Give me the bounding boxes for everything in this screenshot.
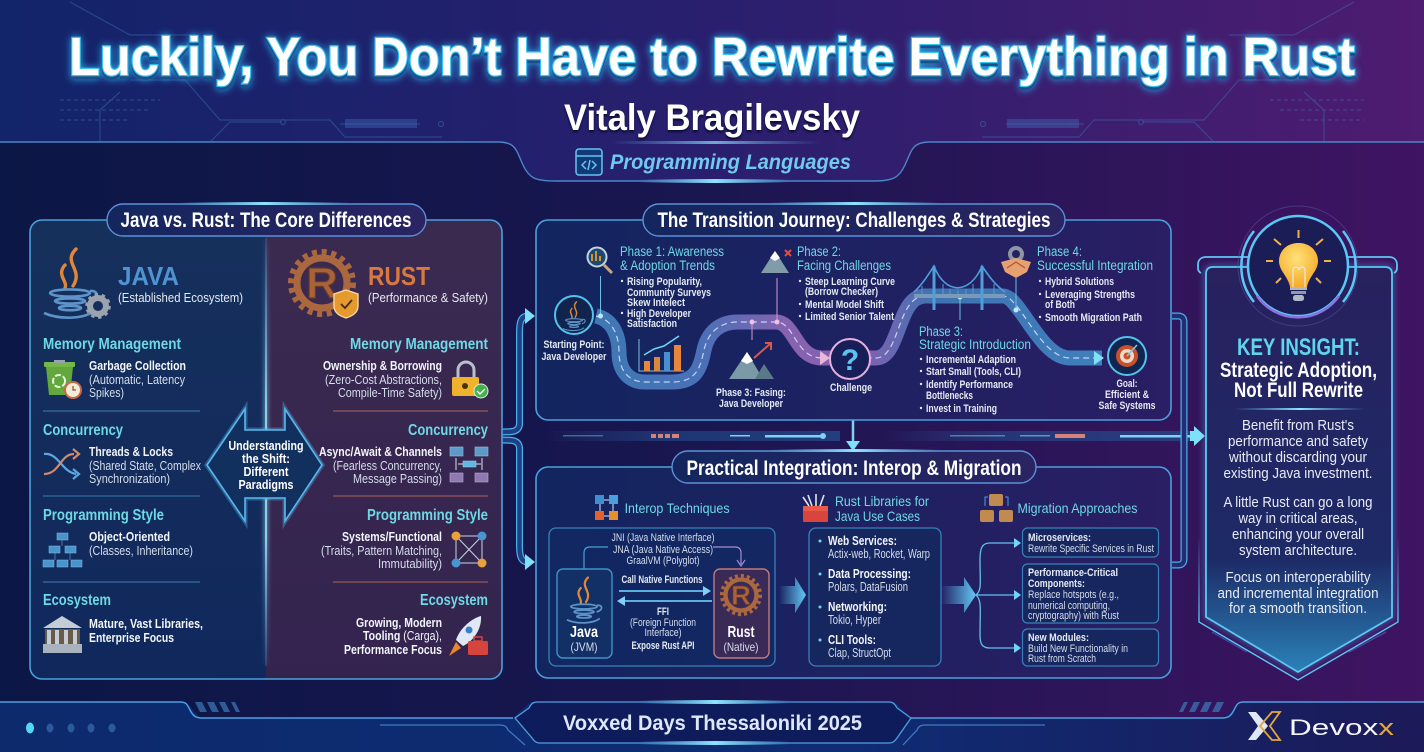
column: interop techniques: GraalVM (Polyglot): [626, 555, 700, 567]
arrow: libraries to migration branches: [941, 538, 1021, 653]
logo: devoxx: [1248, 712, 1394, 740]
icon: toolbox: [803, 494, 828, 522]
column: rust libraries: CLI Tools:: [828, 633, 876, 647]
card: performance critical: [1022, 564, 1158, 623]
column: interop techniques: JNA (Java Native Access): [613, 544, 713, 556]
phase 1: Rising Popularity,: [627, 276, 702, 288]
card: performance critical: numerical computing,: [1028, 600, 1110, 612]
rust header: (Performance & Safety): [368, 291, 488, 305]
java memory management: Memory Management: [43, 336, 181, 353]
column: rust libraries: Rust Libraries for: [835, 493, 929, 509]
icon: interop blocks: [595, 495, 618, 520]
java programming style: [43, 507, 193, 567]
card: performance critical: cryptography) with Rust: [1028, 610, 1119, 622]
column: interop techniques: (Foreign Function: [630, 617, 696, 629]
card: performance critical: Performance-Critical: [1028, 567, 1118, 579]
icon: padlock: [452, 362, 488, 398]
goal node: Efficient &: [1105, 389, 1149, 401]
icon: rocket and toolbox: [449, 616, 488, 656]
card: new modules: Rust from Scratch: [1028, 653, 1096, 665]
phase 3: Phase 3:: [919, 324, 963, 339]
phase 2: [761, 244, 895, 323]
rust concurrency: (Fearless Concurrency,: [333, 459, 442, 473]
mountain waypoint: [716, 343, 786, 410]
rust concurrency: [319, 422, 488, 486]
insight paragraph 1: performance and safety: [1228, 433, 1368, 450]
insight heading: [1220, 334, 1377, 402]
java programming style: Object-Oriented: [89, 530, 170, 544]
phase 3: Strategic Introduction: [919, 337, 1031, 352]
rust box: (Native): [724, 640, 758, 654]
rust programming style: (Traits, Pattern Matching,: [321, 544, 442, 558]
goal node: [1098, 337, 1156, 412]
java ecosystem: [43, 592, 203, 653]
rust ecosystem: Ecosystem: [420, 592, 488, 609]
logo: devoxx: Devox x: [1289, 715, 1394, 740]
phase 3: Invest in Training: [926, 403, 997, 415]
column: migration approaches: Migration Approaches: [1018, 500, 1138, 516]
java concurrency: Threads & Locks: [89, 445, 173, 459]
center double arrow: understanding the shift: Paradigms: [238, 478, 294, 492]
card: performance critical: Components:: [1028, 578, 1085, 590]
panel: Java vs Rust: [30, 202, 502, 679]
challenge node: Challenge: [830, 382, 872, 394]
icon: handshake with gear: [1001, 248, 1031, 278]
card: new modules: New Modules:: [1028, 632, 1089, 644]
center double arrow: understanding the shift: [207, 409, 322, 521]
rust memory management: Ownership & Borrowing: [323, 359, 442, 373]
goal node: Safe Systems: [1098, 400, 1156, 412]
center double arrow: understanding the shift: Different: [244, 465, 289, 479]
column: interop techniques: JNI (Java Native Interface): [612, 532, 714, 544]
column: interop techniques: [549, 495, 775, 666]
java programming style: Programming Style: [43, 507, 164, 524]
goal node: Goal:: [1116, 378, 1138, 390]
column: interop techniques: Call Native Functions: [622, 574, 702, 586]
rust concurrency: Async/Await & Channels: [319, 445, 442, 459]
column: rust libraries: [803, 493, 941, 666]
column: rust libraries: Clap, StructOpt: [828, 646, 891, 660]
rust box: Rust: [728, 624, 754, 641]
card: performance critical: Replace hotspots (e.g.,: [1028, 589, 1119, 601]
java box: Java: [570, 624, 598, 641]
insight paragraph 1: without discarding your: [1228, 449, 1367, 466]
phase 3: Identify Performance: [926, 379, 1013, 391]
icon: graph nodes: [452, 532, 486, 568]
phase 3: Incremental Adaption: [926, 354, 1016, 366]
challenge node: ?: [841, 344, 859, 377]
column: interop techniques: Interop Techniques: [625, 500, 730, 516]
insight paragraph 1: existing Java investment.: [1224, 465, 1372, 482]
insight heading: Not Full Rewrite: [1234, 379, 1363, 402]
rust programming style: [321, 507, 488, 571]
icon: crossing arrows: [44, 449, 79, 479]
phase 2: Steep Learning Curve: [805, 276, 895, 288]
column: rust libraries: Web Services:: [828, 534, 897, 548]
panel: practical integration: [536, 449, 1171, 678]
phase 4: [1001, 244, 1153, 324]
java box: (JVM): [570, 640, 598, 654]
java header: (Established Ecosystem): [118, 291, 243, 305]
card: microservices: Microservices:: [1028, 532, 1091, 544]
title: Luckily, You Don’t Have to Rewrite Everything in Rust: [69, 27, 1355, 87]
card: new modules: [1022, 629, 1158, 666]
column: migration approaches: [980, 494, 1158, 666]
speaker name: Vitaly Bragilevsky: [564, 97, 860, 138]
insight paragraph 3: for a smooth transition.: [1229, 600, 1367, 617]
java header: [118, 261, 243, 305]
category label: Programming Languages: [610, 151, 851, 174]
java ecosystem: Ecosystem: [43, 592, 111, 609]
rust memory management: Compile-Time Safety): [338, 386, 442, 400]
java memory management: Garbage Collection: [89, 359, 186, 373]
icon: light bulb: [1238, 206, 1358, 326]
phase 2: (Borrow Checker): [805, 286, 878, 298]
phase 2: Facing Challenges: [797, 258, 891, 273]
insight heading: KEY INSIGHT:: [1237, 334, 1360, 361]
java ecosystem: Enterprise Focus: [89, 631, 174, 645]
icon: institution: [43, 616, 82, 653]
phase 4: Hybrid Solutions: [1045, 276, 1114, 288]
icon: magnifier: [588, 248, 612, 273]
challenge node: [830, 339, 872, 394]
insight paragraph 2: enhancing your overall: [1232, 526, 1364, 543]
icon: rust gear with shield: [291, 252, 358, 318]
center double arrow: understanding the shift: Understanding: [228, 439, 304, 453]
phase 2: Mental Model Shift: [805, 299, 884, 311]
phase 1: High Developer: [627, 308, 692, 320]
rust ecosystem: Tooling (Carga),: [363, 629, 442, 643]
java box: [557, 569, 612, 658]
footer event label: [515, 700, 911, 745]
card: microservices: [1022, 528, 1158, 557]
rust programming style: Programming Style: [367, 507, 488, 524]
phase 2: Phase 2:: [797, 244, 841, 259]
heading: core differences: [107, 202, 426, 236]
chart: growth bars: [639, 336, 684, 371]
rust memory management: (Zero-Cost Abstractions,: [325, 373, 442, 387]
icon: recycle bin: [44, 360, 81, 398]
phase 4: Smooth Migration Path: [1045, 312, 1142, 324]
phase 1: [588, 244, 724, 371]
heading: transition journey: [643, 202, 1065, 236]
mountain waypoint: Java Developer: [719, 398, 784, 410]
phase 3: [919, 324, 1031, 415]
phase 2: Limited Senior Talent: [805, 311, 894, 323]
rust header: RUST: [368, 261, 430, 291]
rust header: [368, 261, 488, 305]
card: microservices: Rewrite Specific Services in Rust: [1028, 543, 1154, 555]
start point: Java Developer: [542, 351, 607, 363]
phase 4: Leveraging Strengths: [1045, 289, 1135, 301]
icon: class hierarchy: [43, 533, 82, 567]
mountain waypoint: Phase 3: Fasing:: [716, 387, 786, 399]
heading: practical integration: [672, 449, 1036, 483]
java concurrency: Concurrency: [43, 422, 123, 439]
insight paragraph 2: [1224, 494, 1372, 559]
footer band: [0, 700, 1424, 752]
footer dots: [26, 722, 116, 734]
column: interop techniques: Expose Rust API: [632, 640, 694, 652]
column: rust libraries: Polars, DataFusion: [828, 580, 908, 594]
phase 4: Successful Integration: [1037, 258, 1153, 273]
footer event label: Voxxed Days Thessaloniki 2025: [563, 712, 862, 735]
column: rust libraries: Tokio, Hyper: [828, 613, 881, 627]
icon: code window: [576, 149, 602, 175]
rust ecosystem: Growing, Modern: [356, 616, 442, 630]
panel: transition journey: [536, 202, 1171, 420]
java memory management: Spikes): [89, 386, 124, 400]
column: rust libraries: Actix-web, Rocket, Warp: [828, 547, 930, 561]
phase 4: Phase 4:: [1037, 244, 1082, 259]
insight paragraph 1: Benefit from Rust's: [1242, 417, 1354, 434]
connector lines between panels: [502, 308, 1205, 570]
icon: mountain with cross: [761, 250, 791, 273]
java ecosystem: Mature, Vast Libraries,: [89, 617, 203, 631]
phase 1: Satisfaction: [627, 318, 677, 330]
column: rust libraries: Data Processing:: [828, 567, 911, 581]
column: interop techniques: FFI: [657, 606, 669, 618]
java concurrency: (Shared State, Complex: [89, 459, 202, 473]
icon: java cup: [44, 249, 110, 318]
insight paragraph 2: way in critical areas,: [1238, 510, 1358, 527]
insight paragraph 2: system architecture.: [1239, 542, 1357, 559]
java memory management: [43, 336, 186, 400]
icon: migration cubes: [980, 494, 1013, 522]
phase 1: & Adoption Trends: [620, 258, 715, 273]
column: rust libraries: Java Use Cases: [835, 508, 920, 524]
phase 4: of Both: [1045, 299, 1075, 311]
panel: key insight: [1198, 206, 1398, 680]
rust ecosystem: Performance Focus: [344, 643, 442, 657]
start point: Starting Point:: [544, 339, 604, 351]
heading: practical integration: Practical Integration: Interop & Migration: [686, 457, 1022, 480]
icon: channel blocks: [450, 447, 488, 482]
insight paragraph 3: and incremental integration: [1218, 585, 1378, 602]
heading: transition journey: The Transition Journey: Challenges & Strategies: [658, 209, 1050, 232]
rust memory management: [323, 336, 488, 400]
card: new modules: Build New Functionality in: [1028, 643, 1128, 655]
java concurrency: [43, 422, 202, 486]
java concurrency: Synchronization): [89, 472, 170, 486]
journey road: [596, 296, 1104, 382]
rust memory management: Memory Management: [350, 336, 488, 353]
arrow: interop to libraries: [779, 577, 806, 613]
java memory management: (Automatic, Latency: [89, 373, 186, 387]
phase 1: Phase 1: Awareness: [620, 244, 724, 259]
phase 1: Skew Intelect: [627, 297, 685, 309]
java header: JAVA: [118, 261, 179, 291]
rust programming style: Immutability): [378, 557, 442, 571]
column: rust libraries: Networking:: [828, 600, 887, 614]
heading: core differences: Java vs. Rust: The Core Differences: [120, 209, 412, 232]
insight paragraph 2: A little Rust can go a long: [1224, 494, 1372, 511]
rust box: [714, 569, 769, 658]
icon: bridge: [914, 266, 1005, 310]
rust concurrency: Concurrency: [408, 422, 488, 439]
center double arrow: understanding the shift: the Shift:: [242, 452, 290, 466]
phase 1: Community Surveys: [627, 287, 711, 299]
insight heading: Strategic Adoption,: [1220, 359, 1377, 382]
phase 3: Start Small (Tools, CLI): [926, 366, 1021, 378]
rust concurrency: Message Passing): [353, 472, 442, 486]
rust programming style: Systems/Functional: [342, 530, 442, 544]
column: interop techniques: Interface): [644, 627, 682, 639]
java programming style: (Classes, Inheritance): [89, 544, 193, 558]
phase 3: Bottlenecks: [926, 390, 973, 402]
start point: [542, 296, 607, 363]
rust ecosystem: [344, 592, 488, 657]
connector lines: [598, 276, 1018, 340]
insight paragraph 1: [1224, 417, 1372, 482]
insight paragraph 3: Focus on interoperability: [1226, 569, 1371, 586]
insight paragraph 3: [1218, 569, 1378, 617]
arrows: java rust exchange: [617, 586, 712, 606]
